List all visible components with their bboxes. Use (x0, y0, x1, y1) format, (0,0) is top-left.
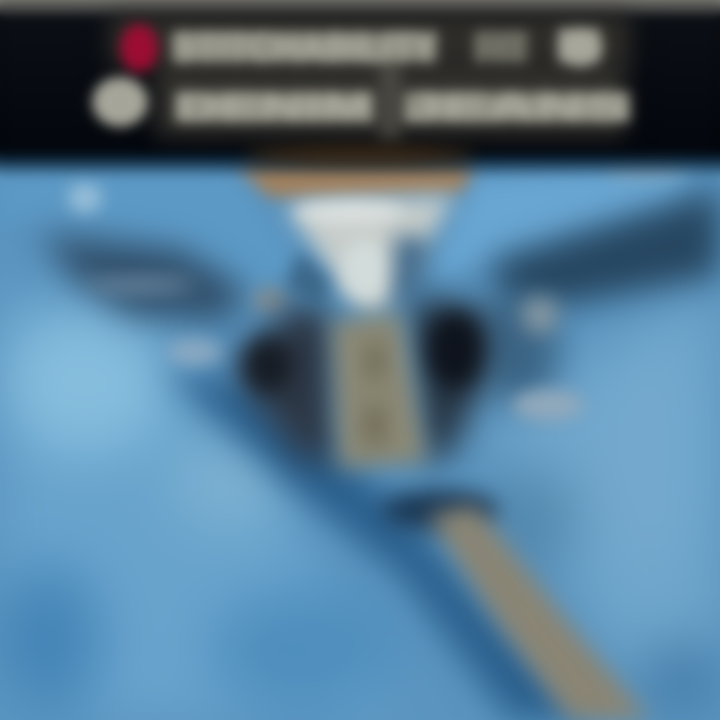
inner lining and white shirt (235, 165, 475, 315)
denim jacket body (0, 160, 720, 720)
right collar (430, 164, 720, 421)
dark placket shadows (235, 235, 498, 530)
left collar (0, 170, 310, 366)
backing banner (0, 0, 720, 178)
zipper (332, 312, 650, 720)
title text: O (92, 64, 148, 138)
title text: FIT (474, 23, 528, 72)
fold shadows (165, 370, 590, 720)
title text: IN (556, 20, 602, 73)
title text (92, 20, 630, 138)
icon: red dot (120, 24, 158, 72)
title text: DENIM (175, 83, 373, 130)
title text: JEANS (404, 83, 630, 130)
title text: STITCHABILITY (172, 23, 437, 72)
title banner (0, 0, 720, 178)
